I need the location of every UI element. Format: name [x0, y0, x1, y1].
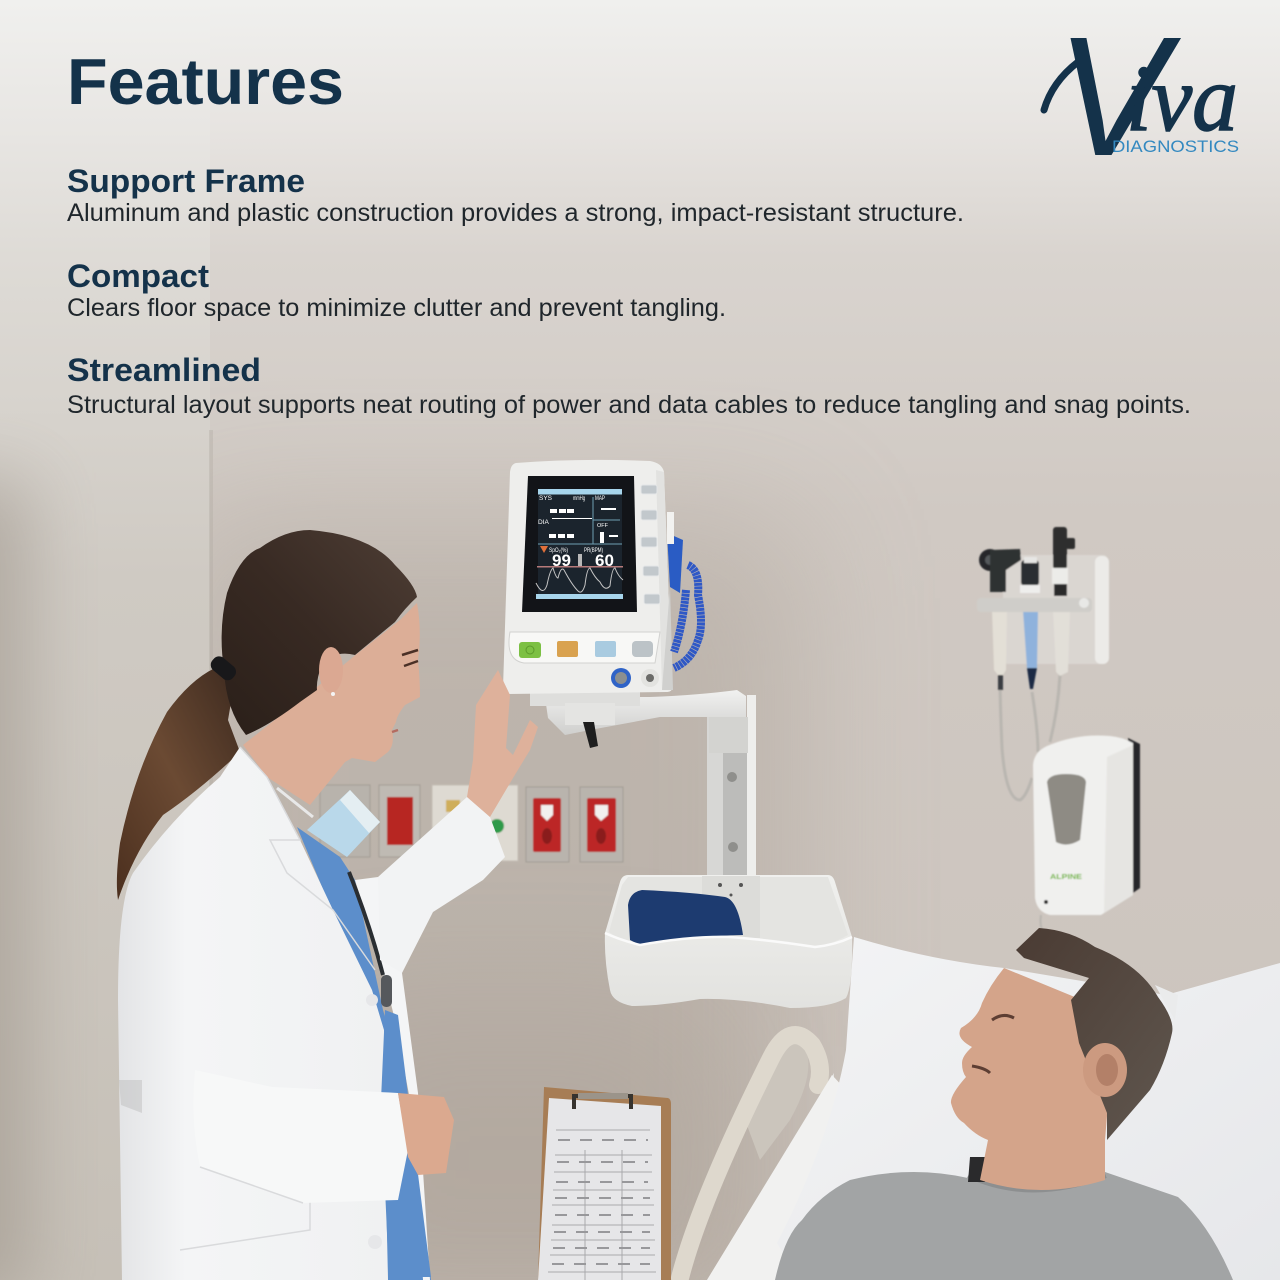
feature: Streamlined: Streamlined: [67, 352, 261, 388]
doctor: lower hand: [398, 1093, 454, 1175]
vital signs monitor: [503, 460, 701, 694]
feature: Streamlined: [67, 352, 1191, 419]
title: Features: [67, 45, 344, 118]
doctor: hair tie: [208, 654, 239, 683]
logo: Viva Diagnostics: [1044, 2, 1239, 192]
blood pressure cuff: [628, 890, 743, 945]
soap dispenser: [1033, 735, 1140, 935]
clipboard: [538, 1087, 671, 1280]
feature: Compact: [67, 258, 726, 322]
monitor screen: 60: [595, 551, 614, 570]
doctor: hair: [222, 530, 417, 735]
patient: hair: [1016, 928, 1172, 1140]
feature: Support Frame: [67, 163, 964, 227]
blue coiled cable: [662, 512, 701, 690]
feature: Compact: Compact: [67, 258, 209, 294]
feature: Support Frame: Aluminum and plastic construction provides a strong, impact-resistant structure.: [67, 199, 964, 227]
doctor: [117, 530, 538, 1280]
feature: Compact: Clears floor space to minimize clutter and prevent tangling.: [67, 294, 726, 322]
monitor front buttons: [519, 641, 653, 658]
monitor screen: SpO₂(%): [549, 548, 568, 554]
doctor: blue scrubs below sleeve: [381, 1010, 431, 1277]
feature: Streamlined: Structural layout supports neat routing of power and data cables to reduce tangling and snag points.: [67, 391, 1191, 419]
bed rail: [680, 1035, 834, 1280]
monitor arm and pole: [530, 690, 756, 875]
monitor screen: DIA: [538, 519, 550, 526]
monitor screen: SYS: [539, 495, 553, 502]
doctor: lower sleeve: [193, 1070, 408, 1203]
monitor screen: MAP: [595, 496, 605, 502]
basket with blood pressure cuff: [605, 875, 852, 1008]
logo: Viva Diagnostics: iva: [1126, 47, 1238, 151]
doctor: coat right front panel: [355, 877, 430, 1280]
patient: head: [951, 968, 1110, 1190]
monitor screen: mmHg: [573, 496, 585, 502]
patient: [775, 928, 1233, 1280]
doctor: ear: [319, 647, 343, 696]
doctor: white lab coat: [118, 747, 388, 1280]
patient: gray shirt: [775, 1172, 1233, 1280]
doctor: raised arm sleeve: [378, 797, 505, 973]
bed sheet and pillow: [707, 937, 1280, 1280]
doctor: eye and lips: [402, 650, 418, 666]
doctor: ponytail: [117, 668, 240, 900]
logo: Viva Diagnostics: DIAGNOSTICS: [1112, 137, 1239, 156]
wall outlets: [320, 785, 623, 862]
otoscope wall set: [977, 527, 1109, 800]
monitor connectors: [611, 668, 659, 688]
monitor screen: [522, 476, 637, 612]
patient: ear: [1083, 1043, 1127, 1097]
monitor screen: 99: [552, 551, 571, 570]
doctor: neck and face: [243, 603, 420, 805]
monitor screen: OFF: [597, 523, 609, 529]
soap dispenser: ALPINE: [1050, 872, 1082, 881]
monitor screen: PR(BPM): [584, 548, 603, 554]
doctor: raised hand: [467, 670, 538, 817]
doctor: stethoscope and pen: [349, 872, 394, 1007]
doctor: face mask: [277, 788, 380, 857]
patient: eye and mouth: [972, 1015, 1014, 1073]
monitor side keys: [641, 485, 660, 604]
feature: Support Frame: Support Frame: [67, 163, 305, 199]
doctor: blue scrubs: [297, 827, 431, 1280]
logo: Viva Diagnostics: V: [1056, 2, 1181, 192]
